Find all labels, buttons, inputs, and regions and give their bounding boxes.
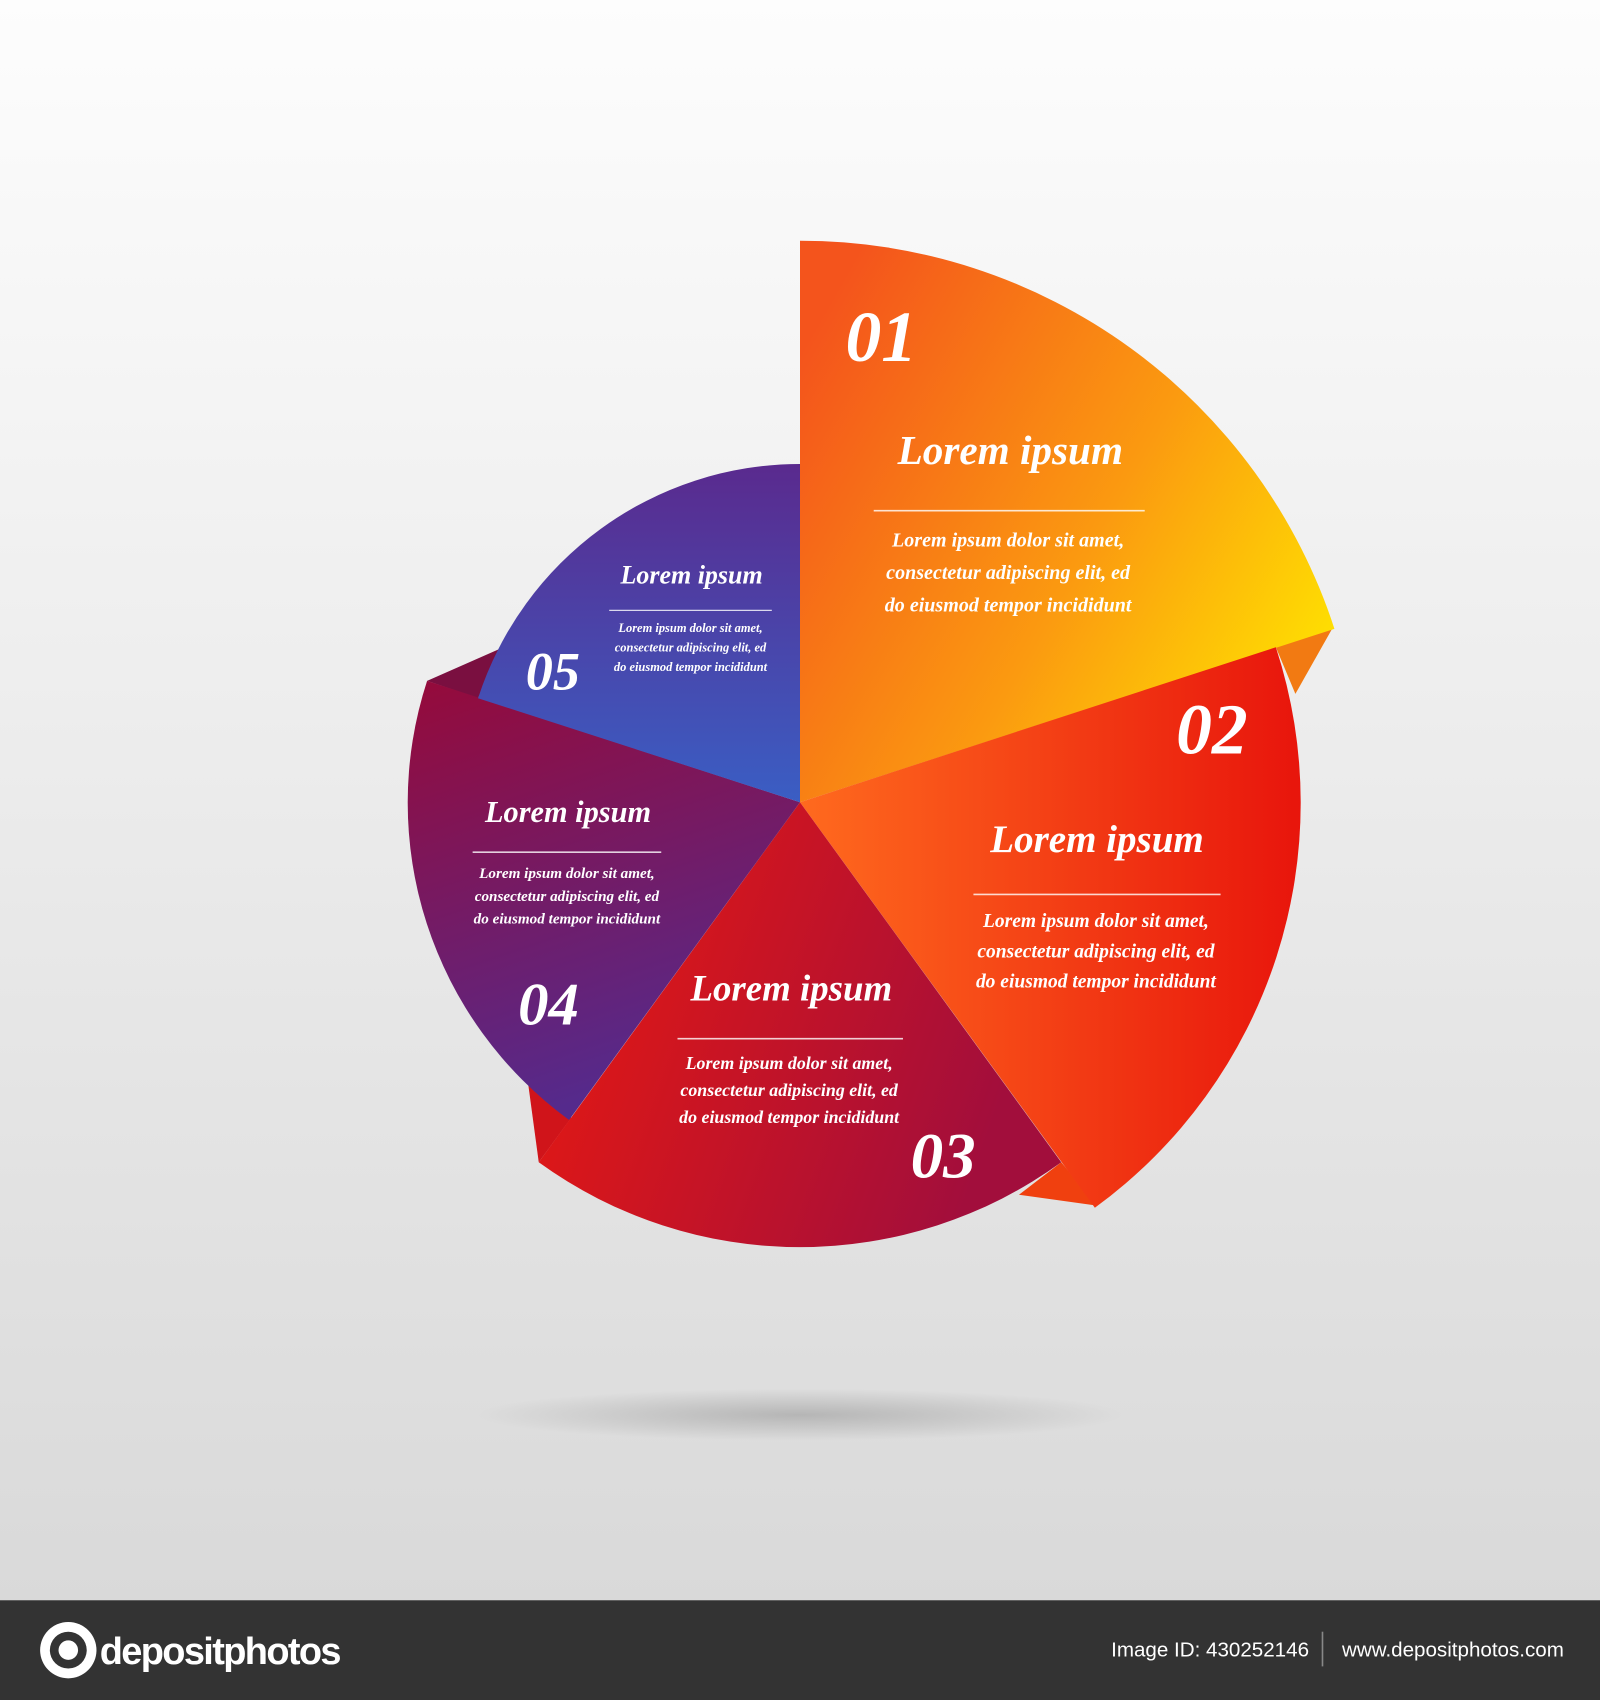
segment 03: do eiusmod tempor incididunt [679, 1107, 900, 1127]
segment 05 [478, 464, 800, 802]
shadow [475, 1389, 1125, 1441]
segment 04: Lorem ipsum dolor sit amet, [478, 865, 655, 882]
segment 01 [800, 241, 1334, 802]
segment 05: do eiusmod tempor incididunt [614, 660, 768, 674]
footer bar: depositphotos [100, 1631, 340, 1673]
segment 05: consectetur adipiscing elit, ed [615, 641, 767, 655]
segment 03 [539, 802, 1061, 1247]
footer bar: www.depositphotos.com [1341, 1639, 1564, 1662]
segment 05: 05 [526, 642, 580, 702]
segment 04: consectetur adipiscing elit, ed [475, 888, 660, 905]
segment 01: consectetur adipiscing elit, ed [886, 562, 1131, 584]
segment 03: Lorem ipsum dolor sit amet, [685, 1053, 893, 1073]
segment 04 [408, 681, 800, 1120]
segment 04: do eiusmod tempor incididunt [474, 911, 661, 928]
footer bar [0, 1600, 1600, 1700]
segment 04: 04 [518, 972, 579, 1039]
segment 02: Lorem ipsum [989, 818, 1204, 861]
segment 02: 02 [1176, 691, 1248, 770]
segment 01: Lorem ipsum dolor sit amet, [891, 529, 1124, 551]
segment 02: Lorem ipsum dolor sit amet, [982, 911, 1209, 932]
segment 01: Lorem ipsum [897, 427, 1123, 473]
segment 03: 03 [911, 1120, 976, 1192]
segment 05: Lorem ipsum [619, 560, 763, 589]
segment 02: do eiusmod tempor incididunt [976, 972, 1216, 993]
icon: logo camera [40, 1622, 96, 1678]
footer bar: Image ID: 430252146 [1111, 1639, 1309, 1662]
segment 02: consectetur adipiscing elit, ed [977, 941, 1215, 962]
segment 03: consectetur adipiscing elit, ed [680, 1080, 899, 1100]
segment 04: Lorem ipsum [484, 795, 651, 829]
fold tabs [427, 627, 1333, 1206]
segment 01: do eiusmod tempor incididunt [885, 594, 1133, 616]
segment 05: Lorem ipsum dolor sit amet, [617, 621, 763, 635]
segment 01: 01 [846, 298, 917, 377]
segment 02 [800, 647, 1301, 1208]
pie chart [408, 241, 1334, 1247]
segment 03: Lorem ipsum [690, 968, 892, 1009]
